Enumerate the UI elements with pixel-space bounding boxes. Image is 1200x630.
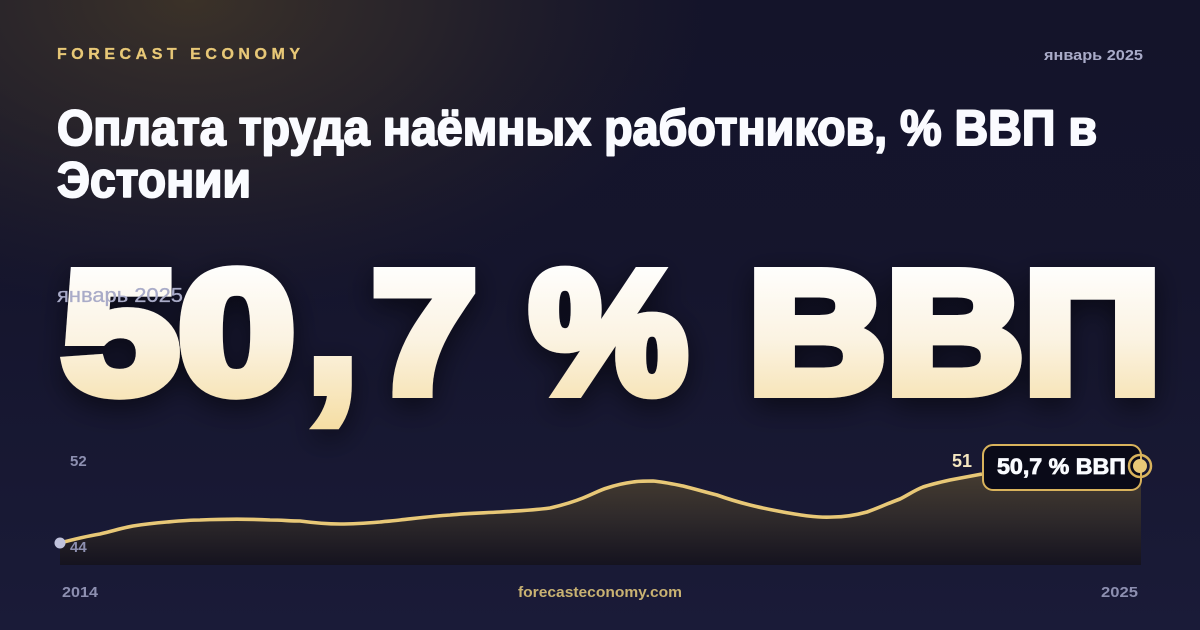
brand label: FORECAST ECONOMY: [57, 46, 300, 63]
value callout: [983, 445, 1141, 490]
last rounded value: 51: [952, 451, 972, 471]
big value: 50: [62, 235, 295, 429]
big value: %: [530, 235, 687, 429]
end year: 2025: [1101, 584, 1138, 601]
chart area fill: [60, 467, 1141, 565]
title: Оплата труда наёмных работников, % ВВП в: [57, 100, 1097, 156]
big value: ВВП: [748, 235, 1161, 429]
date top right: январь 2025: [1044, 47, 1143, 64]
axis label max: 52: [70, 453, 87, 470]
start year: 2014: [62, 584, 99, 601]
date overlay: январь 2025: [57, 285, 183, 307]
big value: 7: [372, 235, 477, 429]
source: forecasteconomy.com: [518, 585, 682, 601]
title: Эстонии: [57, 152, 251, 208]
start point: [54, 538, 66, 548]
end marker: [1129, 455, 1151, 477]
big value: [62, 197, 1161, 438]
area chart: [54, 467, 1141, 565]
axis label min: 44: [70, 539, 87, 556]
chart line: [60, 474, 982, 543]
big value: ,: [303, 197, 362, 438]
value callout: 50,7 % ВВП: [997, 454, 1126, 479]
title: [57, 100, 1097, 208]
